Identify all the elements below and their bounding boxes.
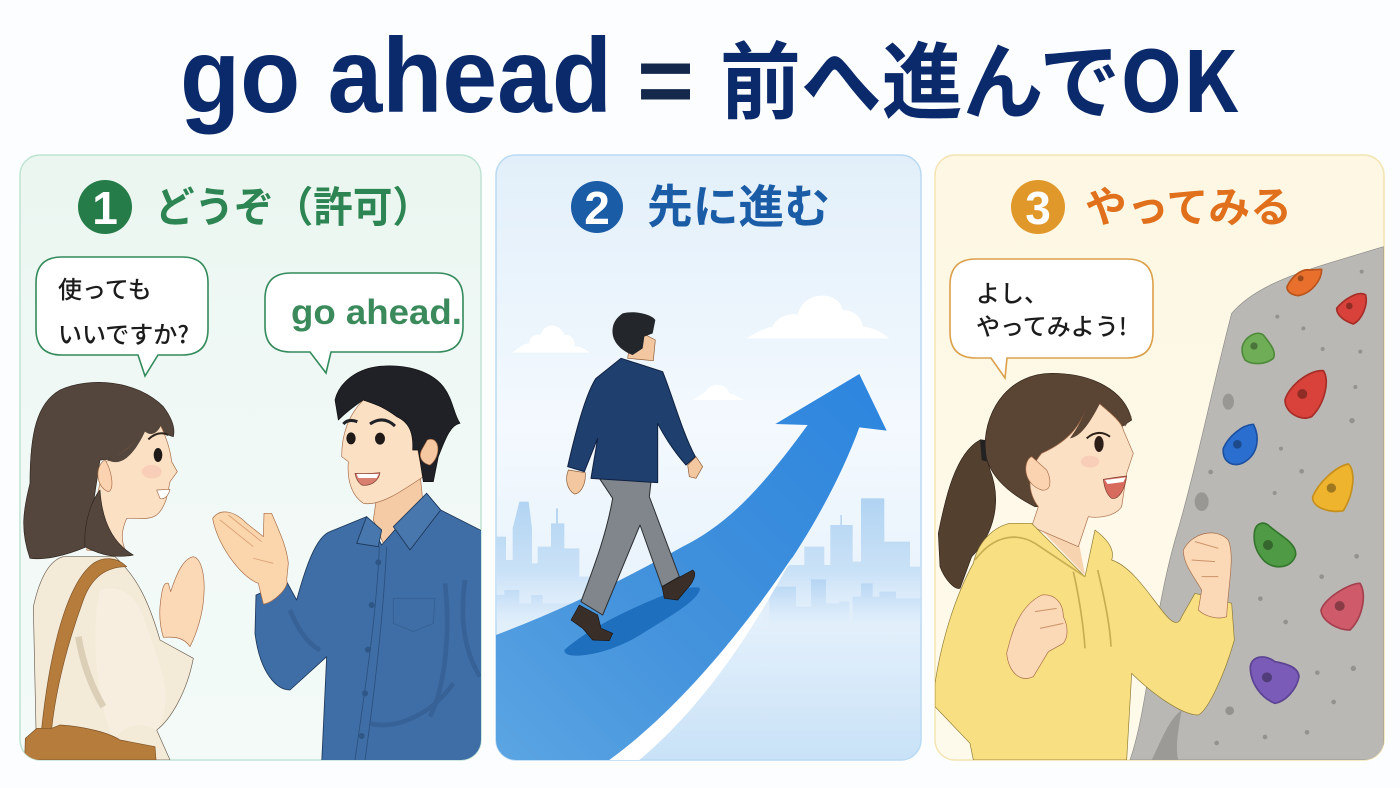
illustration: clouds, city, arrow and walking man [496, 296, 921, 760]
title [180, 16, 1238, 137]
speech bubble: let's try: よし、 [976, 274, 1048, 309]
title: = [637, 27, 694, 134]
title: 前へ進んでOK [720, 16, 1238, 137]
illustration: woman with bag [24, 382, 204, 760]
clouds [512, 296, 889, 400]
heading: permission: 1 [92, 182, 118, 234]
speech bubble: let's try: やってみよう! [976, 307, 1127, 342]
heading: try: 3 [1025, 182, 1051, 234]
girl [935, 373, 1234, 760]
heading: move ahead: 先に進む [647, 171, 830, 237]
panel: 3 give it a try [935, 155, 1384, 760]
climbing wall [1130, 247, 1383, 760]
arrow [496, 374, 887, 760]
speech bubble: question: いいですか? [58, 315, 189, 350]
title: go ahead [180, 17, 612, 135]
speech bubble: let's try [950, 259, 1153, 378]
speech bubble: go ahead [265, 273, 463, 373]
panel: 2 moving forward [496, 155, 921, 760]
speech bubble: question [36, 257, 208, 376]
man walking [567, 312, 703, 641]
walker shadow [564, 587, 700, 656]
heading: permission: どうぞ（許可） [155, 174, 432, 235]
heading: try: やってみる [1085, 174, 1292, 235]
speech bubble: question: 使っても [58, 270, 152, 305]
illustration: man gesturing [213, 366, 487, 763]
climbing holds [1223, 269, 1366, 703]
illustration: climbing wall and girl [935, 247, 1383, 760]
city skyline [496, 498, 921, 627]
speech bubble: go ahead: go ahead. [291, 293, 462, 332]
heading: move ahead: 2 [584, 182, 610, 234]
panel: 1 permission [20, 155, 487, 763]
